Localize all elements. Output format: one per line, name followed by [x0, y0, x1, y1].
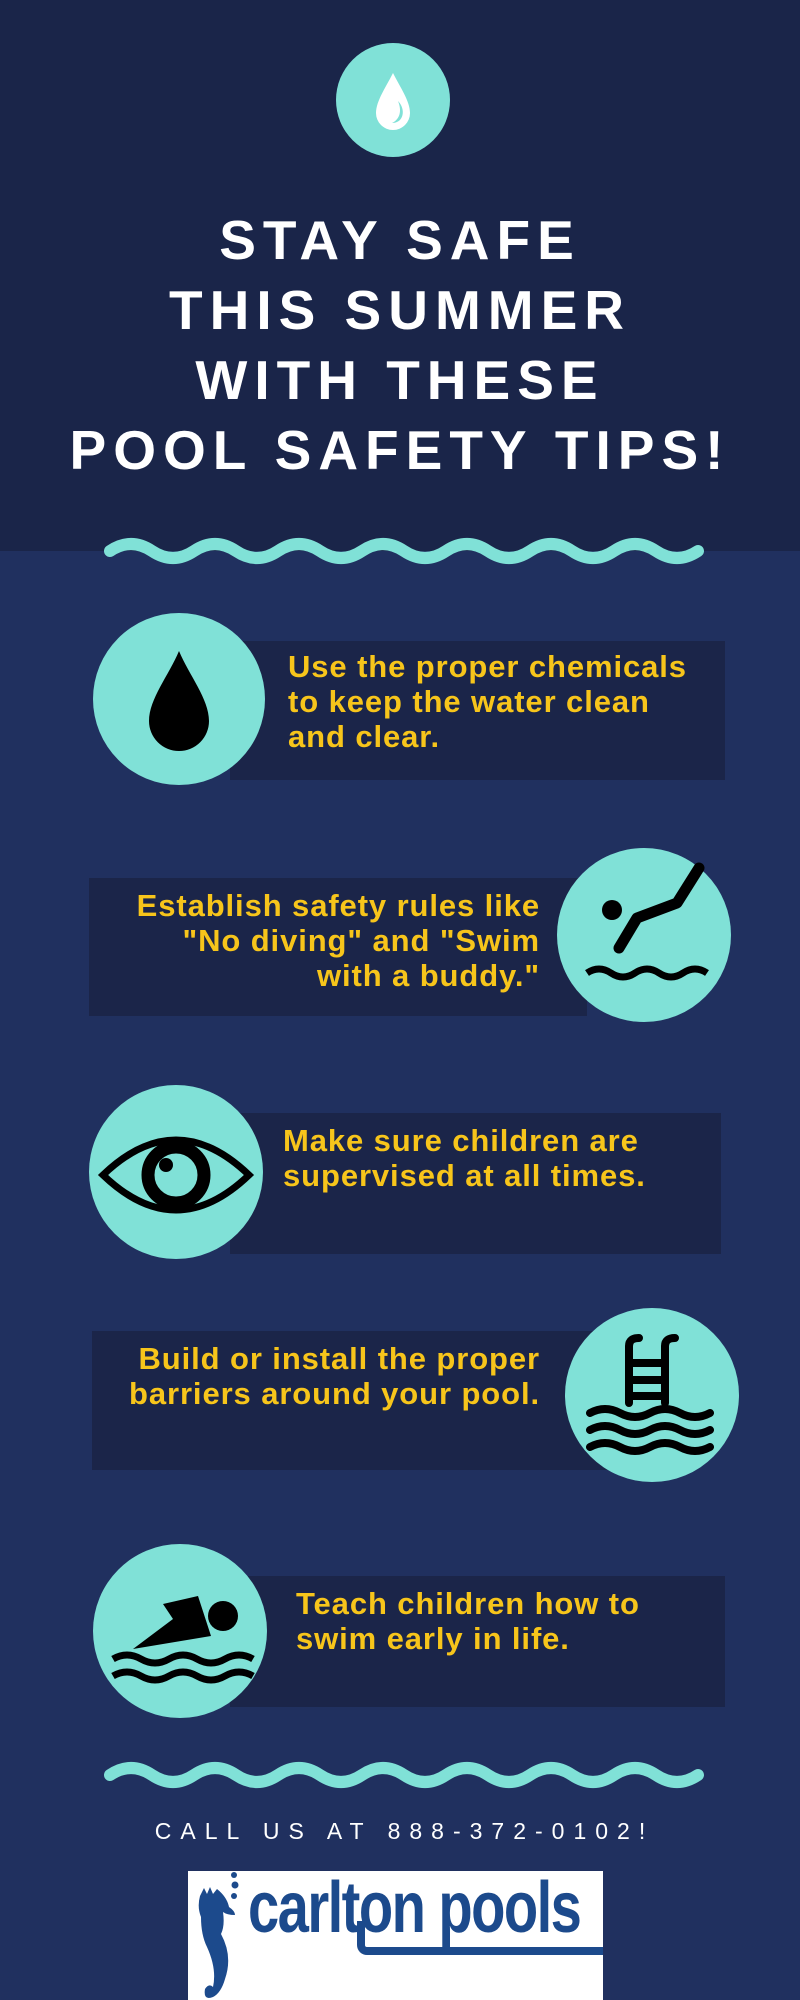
text: tip 3	[283, 1123, 646, 1193]
text: tip 4: Build or install the proper	[138, 1341, 540, 1376]
text: tip 5: swim early in life.	[296, 1621, 570, 1656]
text: logo: carlton pools	[248, 1868, 580, 1948]
panel: tip 3 supervision	[89, 1085, 721, 1259]
text: tip 5	[296, 1586, 640, 1656]
icon: water drop top	[336, 43, 450, 157]
text: tip 4	[129, 1341, 540, 1411]
text: tip 1: and clear.	[288, 719, 440, 754]
title	[70, 209, 730, 481]
title: STAY SAFE	[219, 209, 581, 271]
text: tip 3: Make sure children are	[283, 1123, 639, 1158]
icon: pool ladder	[565, 1308, 739, 1482]
icon: seahorse	[198, 1872, 238, 1998]
icon: diver	[557, 848, 731, 1022]
text: tip 2: with a buddy."	[317, 958, 540, 993]
logo: carlton pools	[188, 1871, 603, 2000]
icon: eye	[89, 1085, 263, 1259]
wave divider top	[104, 538, 704, 564]
wave divider bottom	[104, 1762, 704, 1788]
panel: tip 4 barriers	[92, 1308, 739, 1482]
header background	[0, 0, 800, 551]
call to action: CALL US AT 888-372-0102!	[155, 1818, 654, 1844]
panel: tip 5 swimming	[93, 1544, 725, 1718]
icon: swimmer	[93, 1544, 267, 1718]
text: tip 3: supervised at all times.	[283, 1158, 646, 1193]
title: THIS SUMMER	[169, 279, 631, 341]
panel: tip 2 rules	[89, 848, 731, 1022]
text: tip 1	[288, 649, 687, 754]
text: tip 2: Establish safety rules like	[137, 888, 540, 923]
text: tip 2: "No diving" and "Swim	[182, 923, 540, 958]
panel: tip 1 chemicals	[93, 613, 725, 785]
text: tip 5: Teach children how to	[296, 1586, 640, 1621]
text: tip 4: barriers around your pool.	[129, 1376, 540, 1411]
text: tip 1: to keep the water clean	[288, 684, 650, 719]
text: tip 1: Use the proper chemicals	[288, 649, 687, 684]
text: tip 2	[137, 888, 540, 993]
title: WITH THESE	[195, 349, 605, 411]
title: POOL SAFETY TIPS!	[70, 419, 730, 481]
icon: black drop	[93, 613, 265, 785]
